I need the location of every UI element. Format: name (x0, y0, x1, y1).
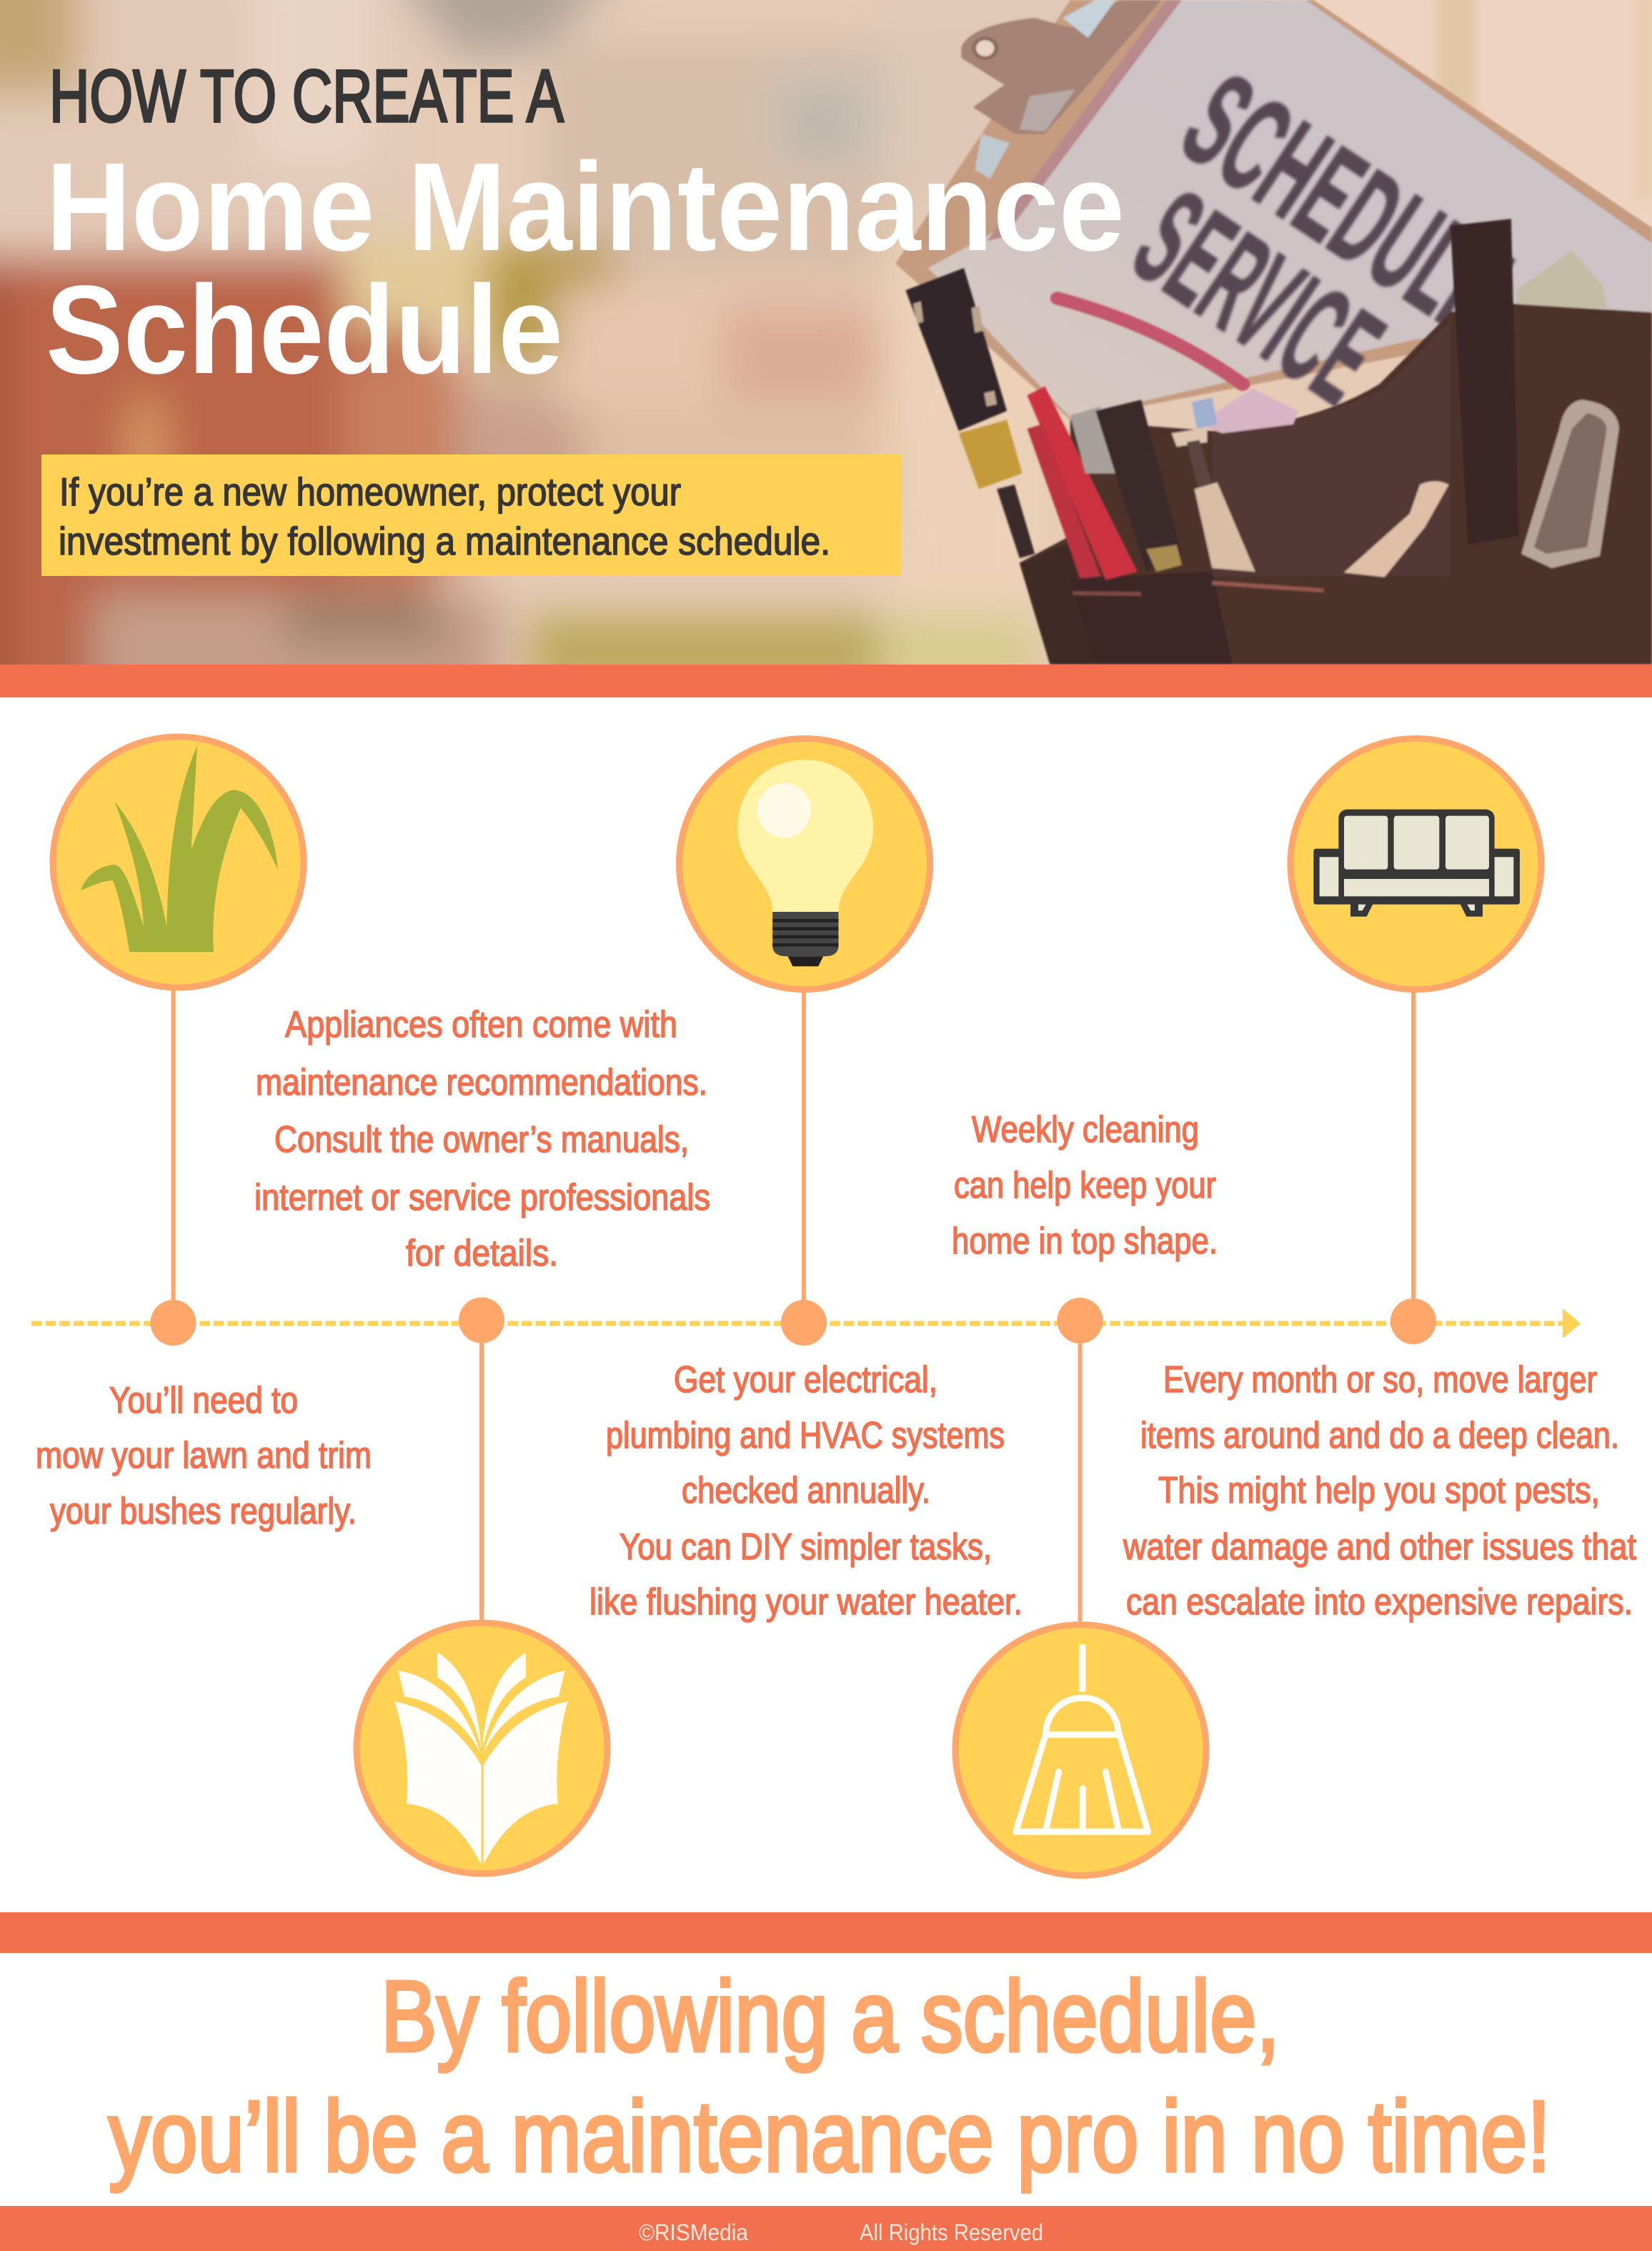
icon: broom (955, 1625, 1206, 1875)
pen (1172, 428, 1207, 447)
text: lawn: You’ll need to (109, 1380, 298, 1421)
stem (479, 1341, 484, 1622)
text: appliances: maintenance recommendations. (256, 1062, 707, 1103)
dot (781, 1300, 827, 1346)
tall black tool (1451, 219, 1519, 545)
clipboard wording (1132, 74, 1518, 407)
icon: light bulb (679, 739, 930, 989)
step 3: systems (589, 739, 1022, 1623)
clipboard paper (928, 0, 1652, 417)
title (46, 55, 1125, 400)
dot (459, 1298, 504, 1343)
text: appliances: for details. (406, 1233, 558, 1274)
text: systems: You can DIY simpler tasks, (620, 1526, 992, 1568)
icon: grass (53, 737, 304, 988)
copyright: ©RISMedia (639, 2220, 748, 2245)
text: systems: plumbing and HVAC systems (606, 1415, 1005, 1456)
text: systems: like flushing your water heater. (589, 1581, 1022, 1623)
closing statement: By following a schedule, (381, 1959, 1280, 2072)
text: lawn: your bushes regularly. (50, 1491, 357, 1532)
text: lawn (36, 1380, 372, 1532)
text: systems: checked annually. (682, 1470, 930, 1511)
stem (802, 991, 806, 1301)
step 1: lawn (36, 737, 372, 1532)
stem (171, 990, 176, 1301)
step 5: deep clean (1123, 739, 1636, 1623)
timeline arrow (31, 1308, 1581, 1338)
text: systems (589, 1359, 1022, 1623)
black tool (1070, 407, 1121, 473)
header photo: tool pouch and clipboard (0, 0, 1652, 665)
text: appliances: Appliances often come with (285, 1004, 677, 1045)
headline line 2: Schedule (46, 260, 563, 400)
headline line 1: Home Maintenance (46, 137, 1125, 277)
text: lawn: mow your lawn and trim (36, 1435, 372, 1476)
text: systems: Get your electrical, (674, 1359, 937, 1401)
dot (1390, 1298, 1436, 1344)
text: weekly cleaning: home in top shape. (952, 1221, 1218, 1262)
red marker stroke (1058, 299, 1243, 384)
step 2: appliances (254, 1004, 710, 1874)
pink item (1197, 389, 1298, 433)
icon: sofa (1290, 739, 1541, 989)
intro callout: investment by following a maintenance schedule. (59, 519, 830, 563)
kicker: how to create a: HOW TO CREATE A (49, 55, 564, 138)
paper scrap behind pouch (1516, 250, 1608, 308)
dot (150, 1300, 196, 1346)
metal clip (961, 0, 1162, 134)
footer band (0, 2206, 1652, 2251)
tool pouch (1020, 304, 1652, 665)
text: weekly cleaning: can help keep your (954, 1165, 1216, 1206)
rights reserved: All Rights Reserved (860, 2220, 1043, 2245)
stem (1078, 1341, 1082, 1622)
intro callout (41, 454, 901, 576)
stem (1411, 991, 1415, 1301)
text: appliances: internet or service professionals (254, 1177, 710, 1218)
closing statement (109, 1959, 1551, 2192)
orange band under header (0, 665, 1652, 697)
red pliers (1027, 387, 1137, 580)
orange band above closing line (0, 1912, 1652, 1953)
text: appliances: Consult the owner’s manuals, (274, 1119, 689, 1161)
text: appliances (254, 1004, 710, 1274)
beige tool (1344, 481, 1449, 577)
clipboard board (895, 0, 1652, 420)
dot (1058, 1298, 1103, 1343)
text: weekly cleaning: Weekly cleaning (972, 1109, 1199, 1151)
text: weekly cleaning (952, 1109, 1218, 1262)
icon: book (357, 1623, 607, 1874)
intro callout: If you’re a new homeowner, protect your (59, 469, 681, 514)
text: deep clean (1123, 1359, 1636, 1623)
clear tool (1521, 399, 1619, 568)
screwdriver (905, 268, 1007, 431)
step 4: weekly cleaning (952, 1109, 1218, 1875)
